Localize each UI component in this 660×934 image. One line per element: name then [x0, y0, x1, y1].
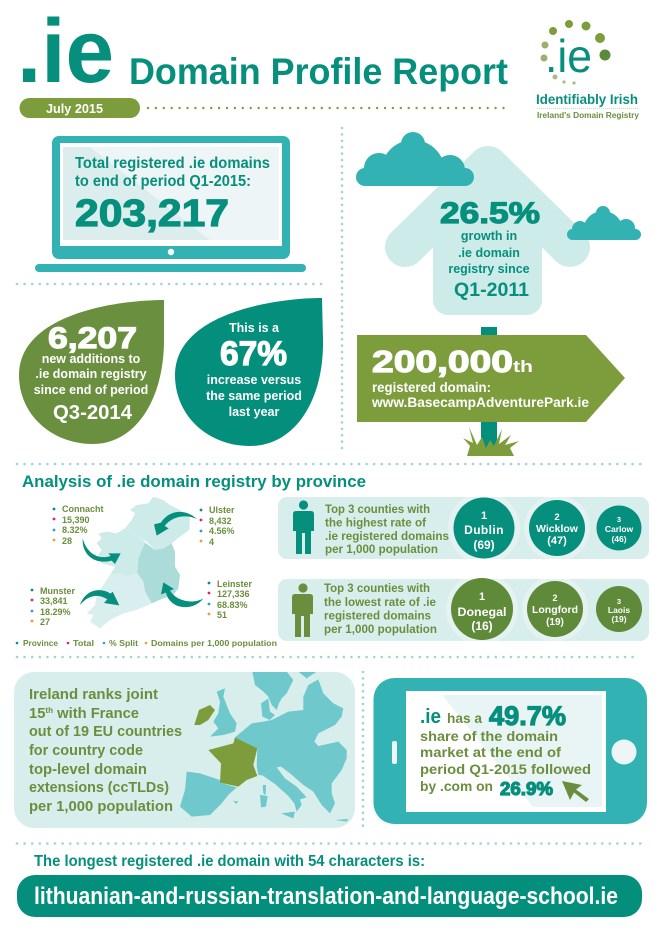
- panel: EU ranking: extensions (ccTLDs): [29, 780, 169, 796]
- phone: market share: by .com on: [420, 778, 493, 794]
- county: Donegal: (16): [471, 619, 493, 633]
- panel: lowest rate counties: registered domains: [324, 610, 431, 622]
- leaf: 67% increase: the same period: [206, 389, 302, 403]
- stats: Ulster: 4: [209, 537, 214, 547]
- panel: highest rate counties: the highest rate of: [325, 518, 426, 530]
- stats: Connacht: 8.32%: [62, 525, 88, 535]
- county: Wicklow: (47): [547, 535, 567, 547]
- laptop: total registered domains: to end of period Q1-2015:: [75, 173, 251, 190]
- panel: lowest rate counties: the lowest rate of .ie: [324, 597, 436, 609]
- stats: Leinster: [208, 579, 253, 620]
- panel: highest rate counties: Top 3 counties with: [325, 504, 430, 516]
- stats: Munster: [31, 586, 76, 627]
- county: Dublin: (69): [473, 538, 495, 552]
- phone: market share: share of the domain: [420, 728, 558, 744]
- laptop: total registered domains: [35, 136, 306, 272]
- panel: EU ranking: Ireland ranks joint: [29, 687, 158, 703]
- map of Ireland by province: [80, 497, 203, 628]
- longest domain pill: [17, 875, 642, 917]
- map legend: % Split: [109, 638, 138, 648]
- icon: cursor arrow: [562, 781, 589, 802]
- stats: Ulster: [200, 505, 235, 547]
- leaf: 67% increase: This is a: [229, 321, 280, 335]
- arrow: Ulster: [154, 512, 197, 536]
- laptop: total registered domains: Total registered .ie domains: [75, 155, 270, 172]
- title: Domain Profile Report: [129, 51, 508, 92]
- map legend: Domains per 1,000 population: [151, 638, 277, 648]
- phone: market share: [374, 678, 647, 824]
- phone: market share: 26.9%: [500, 779, 553, 799]
- arrow: 26.5% growth: [405, 166, 570, 315]
- leaf: 67% increase: 67%: [220, 335, 287, 373]
- icon: person teal: [293, 500, 314, 554]
- signpost: 200,000th domain: th: [513, 357, 533, 376]
- leaf: new additions: .ie domain registry: [35, 367, 147, 381]
- panel: highest rate counties: per 1,000 population: [325, 544, 438, 556]
- county: Carlow: 3: [617, 515, 621, 524]
- stats: Leinster: Leinster: [217, 579, 253, 589]
- panel: EU ranking: out of 19 EU countries: [29, 724, 182, 740]
- heading: province analysis: Analysis of .ie domain registry by province: [22, 472, 366, 491]
- arrow: 26.5% growth: .ie domain: [458, 246, 520, 260]
- leaf: new additions: Q3-2014: [53, 402, 133, 424]
- stats: Munster: 18.29%: [40, 607, 71, 617]
- leaf: 67% increase: [175, 298, 323, 446]
- phone: market share: period Q1-2015 followed: [420, 761, 591, 777]
- arrow: Connacht: [83, 538, 121, 564]
- county: Laois: (19): [611, 614, 627, 624]
- leaf: 67% increase: increase versus: [207, 373, 301, 387]
- leaf: 67% increase: last year: [229, 405, 280, 419]
- phone: market share: market at the end of: [420, 744, 561, 760]
- stats: Ulster: 4.56%: [209, 526, 235, 536]
- date pill: July 2015: [46, 101, 103, 116]
- logo: Identifiably Irish: Identifiably Irish: [536, 91, 638, 107]
- stats: Ulster: 8,432: [209, 516, 232, 526]
- leaf: new additions: new additions to: [42, 352, 141, 366]
- map legend: Total: [73, 638, 94, 648]
- title: [17, 2, 508, 102]
- county: Donegal: [451, 578, 513, 640]
- county: Dublin: Dublin: [464, 523, 504, 537]
- arrow: Munster: [80, 590, 119, 605]
- panel: EU ranking: 15: [29, 706, 45, 722]
- county: Laois: [596, 586, 642, 632]
- logo: Identifiably Irish: .ie: [545, 30, 592, 82]
- panel: EU ranking: per 1,000 population: [29, 799, 173, 815]
- arrow: 26.5% growth: growth in: [461, 229, 517, 243]
- county: Carlow: [596, 506, 642, 550]
- county: Longford: 2: [552, 593, 558, 603]
- decorative dotted dividers: [17, 128, 642, 844]
- county: Donegal: 1: [479, 591, 485, 603]
- title: .ie: [17, 2, 114, 102]
- leaf: new additions: [19, 300, 164, 444]
- phone: market share: 49.7%: [489, 701, 566, 731]
- map legend: Province: [23, 638, 58, 648]
- stats: Leinster: 51: [217, 610, 227, 620]
- icon: small cloud: [567, 206, 641, 240]
- stats: Connacht: 15,390: [62, 515, 90, 525]
- county: Carlow: (46): [611, 534, 627, 544]
- signpost: 200,000th domain: [357, 327, 625, 456]
- stats: Munster: 33,841: [40, 596, 68, 606]
- leaf: new additions: since end of period: [34, 383, 148, 397]
- panel: highest rate counties: .ie registered domains: [325, 531, 449, 543]
- signpost: 200,000th domain: 200,000: [372, 344, 513, 379]
- signpost: 200,000th domain: www.BasecampAdventurePark.ie: [371, 395, 589, 410]
- county: Longford: [527, 581, 583, 637]
- signpost: 200,000th domain: registered domain:: [372, 380, 491, 395]
- county: Dublin: [454, 498, 514, 558]
- county: Dublin: 1: [481, 510, 487, 522]
- stats: Connacht: [53, 504, 104, 546]
- stats: Munster: 27: [40, 617, 50, 627]
- map of Europe: [180, 672, 348, 822]
- county: Longford: Longford: [532, 605, 578, 616]
- panel: EU ranking: top-level domain: [29, 762, 147, 778]
- panel: lowest rate counties: [278, 573, 649, 645]
- panel: highest rate counties: [278, 492, 649, 564]
- panel: lowest rate counties: Top 3 counties with: [324, 583, 430, 595]
- panel: EU ranking: th: [45, 706, 53, 715]
- stats: Leinster: 127,336: [217, 589, 250, 599]
- arrow: 26.5% growth: 26.5%: [440, 197, 540, 230]
- logo: Identifiably Irish: [536, 20, 640, 120]
- laptop: total registered domains: 203,217: [75, 193, 229, 235]
- county: Carlow: Carlow: [605, 524, 634, 534]
- panel: lowest rate counties: per 1,000 population: [324, 624, 437, 636]
- county: Laois: 3: [617, 597, 621, 606]
- stats: Connacht: 28: [62, 536, 72, 546]
- icon: large cloud: [356, 132, 474, 186]
- panel: EU ranking: [14, 672, 355, 828]
- logo: Identifiably Irish: Ireland's Domain Registry: [537, 111, 640, 120]
- icon: person olive: [292, 583, 313, 637]
- arrow: 26.5% growth: Q1-2011: [454, 280, 529, 301]
- county: Wicklow: Wicklow: [536, 523, 579, 535]
- county: Wicklow: 2: [554, 512, 560, 523]
- county: Wicklow: [529, 500, 585, 556]
- stats: Ulster: Ulster: [209, 505, 235, 515]
- leaf: new additions: 6,207: [48, 322, 137, 355]
- arrow: Leinster: [161, 582, 203, 607]
- arrow: 26.5% growth: registry since: [448, 262, 530, 276]
- panel: EU ranking: with France: [53, 706, 139, 722]
- stats: Leinster: 68.83%: [217, 600, 248, 610]
- phone: market share: has a: [447, 710, 482, 726]
- phone: market share: .ie: [420, 706, 441, 728]
- county: Donegal: Donegal: [458, 605, 506, 619]
- date pill: [20, 98, 140, 118]
- icon: grass: [463, 427, 519, 456]
- stats: Connacht: Connacht: [62, 504, 104, 514]
- map legend: [16, 638, 277, 648]
- panel: EU ranking: for country code: [29, 743, 143, 759]
- longest domain label: The longest registered .ie domain with 54 characters is:: [34, 853, 425, 870]
- stats: Munster: Munster: [40, 586, 76, 596]
- county: Laois: Laois: [608, 605, 630, 615]
- county: Longford: (19): [546, 617, 564, 628]
